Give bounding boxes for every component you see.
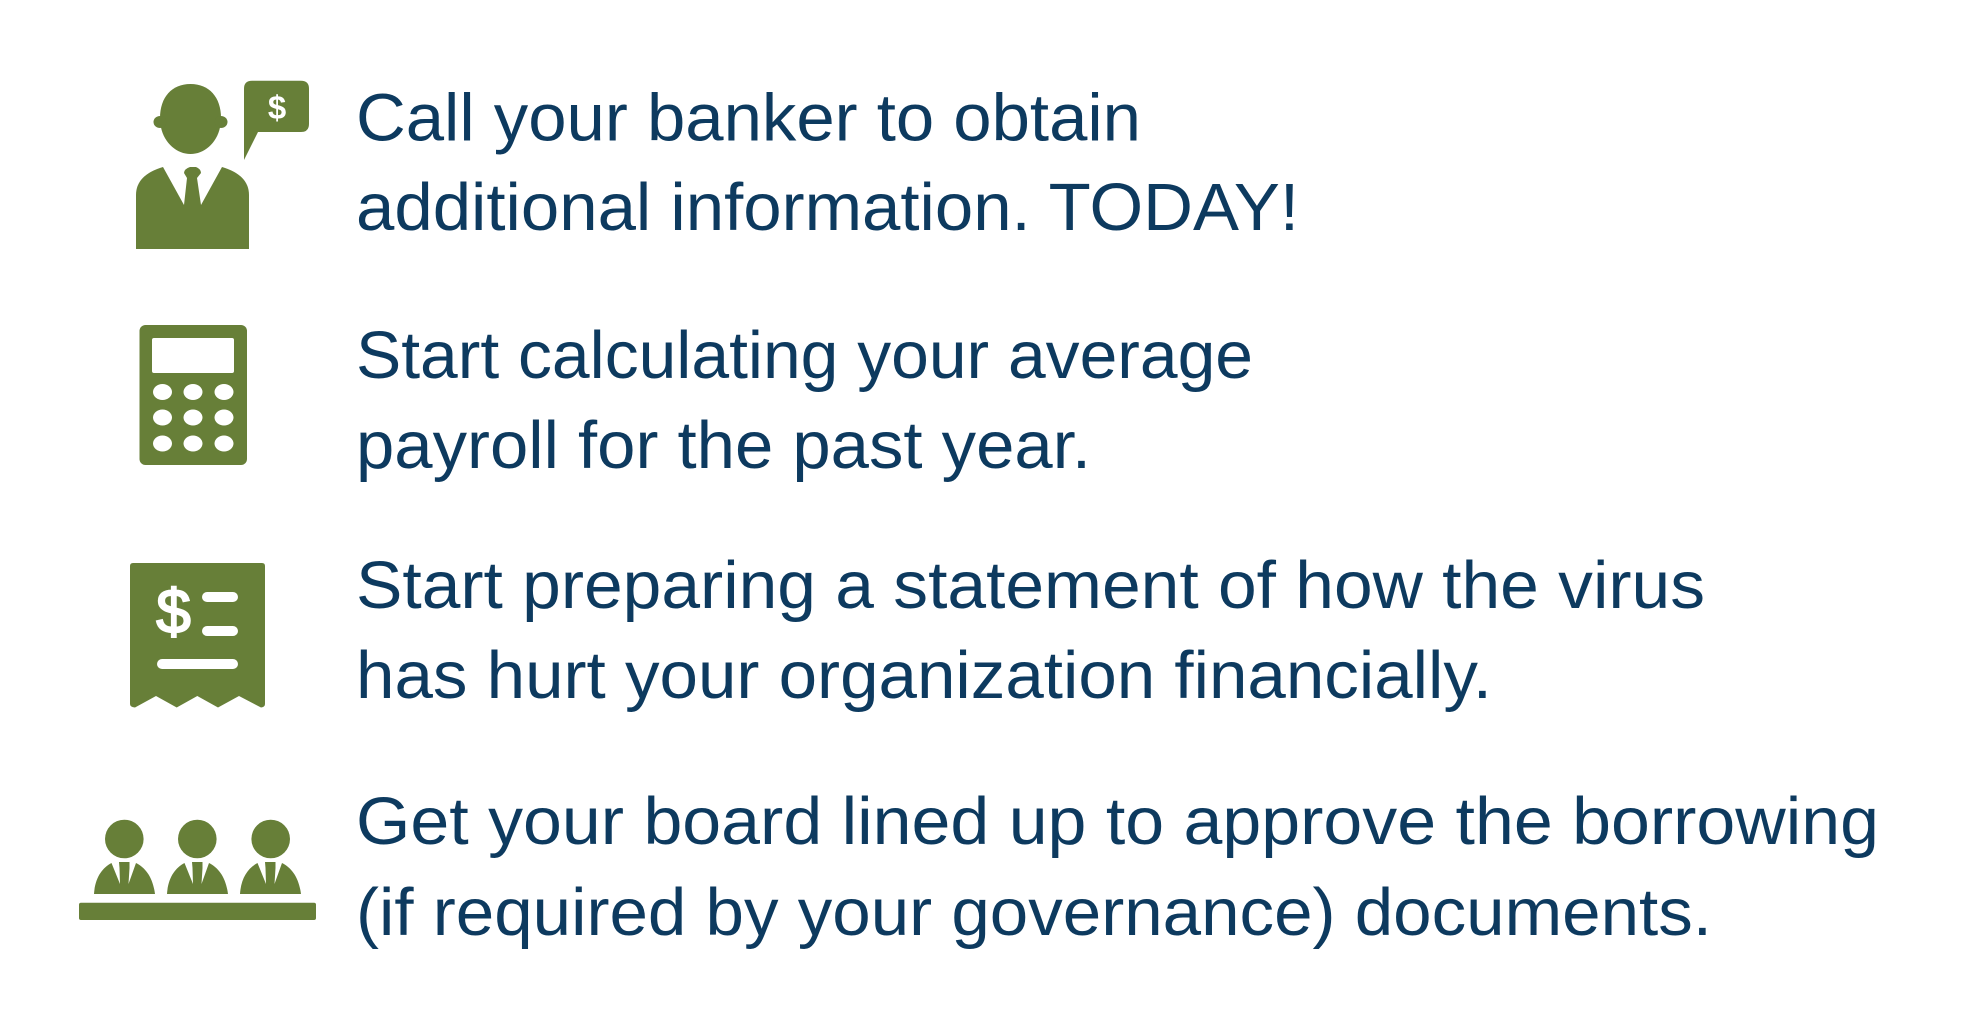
text: start calculating payroll: payroll for the past year. [356,408,1091,483]
text: get your board lined up [356,784,1879,950]
text: get your board lined up: (if required by your governance) documents. [356,875,1712,950]
text: start preparing statement: Start preparing a statement of how the virus [356,548,1705,623]
text: call your banker: Call your banker to obtain [356,80,1141,156]
text: start calculating payroll: Start calculating your average [356,318,1253,393]
text: start preparing statement [356,548,1705,713]
icon: banker with dollar speech bubble [136,81,309,249]
text: call your banker: additional information. TODAY! [356,170,1299,245]
icon: receipt with dollar sign: $ [156,578,191,647]
text: start preparing statement: has hurt your organization financially. [356,638,1492,713]
text: get your board lined up: Get your board lined up to approve the borrowing [356,784,1879,859]
icon: calculator [140,325,247,465]
icon: receipt with dollar sign [130,563,265,708]
icon: board members at table [79,820,316,920]
icon: banker with dollar speech bubble: $ [268,89,286,126]
text: call your banker [356,80,1299,245]
text: start calculating payroll [356,318,1253,483]
